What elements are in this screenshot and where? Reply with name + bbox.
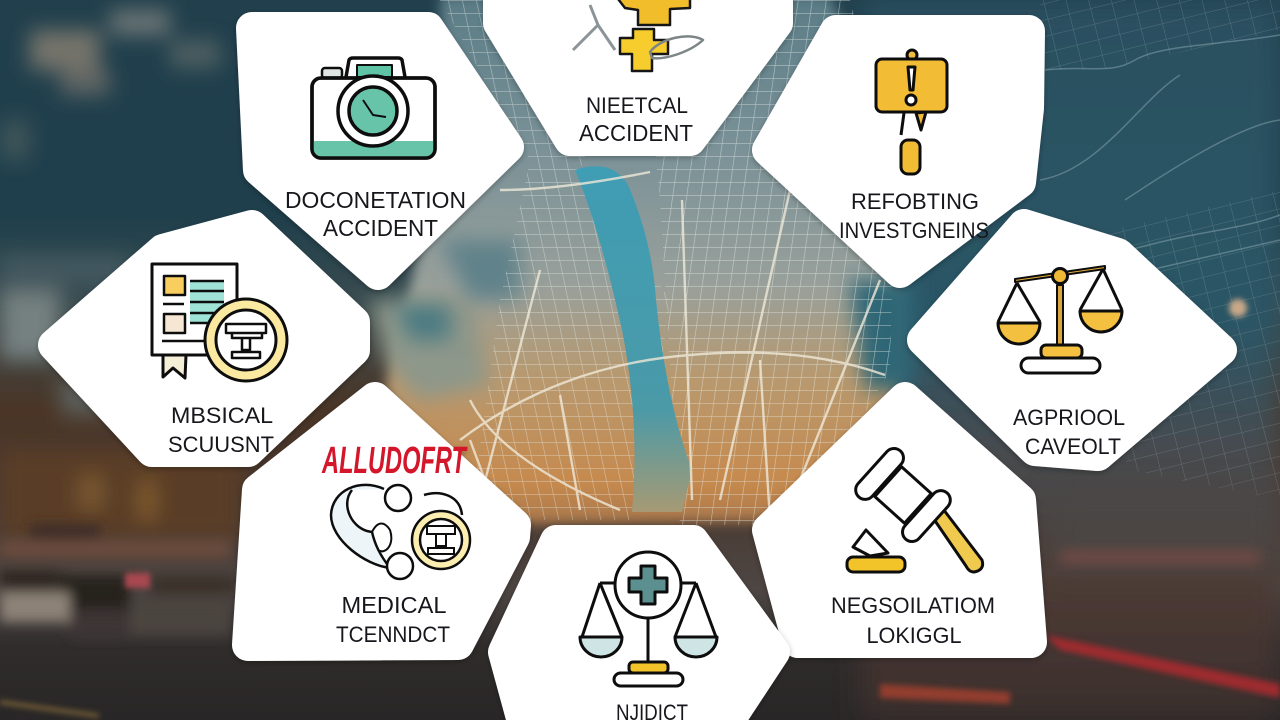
panel: documentation accident bbox=[252, 28, 508, 274]
panel: scales agreement right bbox=[923, 225, 1221, 459]
label: agreement: AGPRIOOL bbox=[1013, 405, 1125, 430]
panel: reporting investigation bbox=[768, 31, 1029, 272]
icon: gavel bbox=[847, 445, 983, 572]
label: legal: LOKIGGL bbox=[866, 623, 962, 648]
label line two: ACCIDENT bbox=[323, 215, 438, 241]
label: documentation: DOCONETATION bbox=[285, 187, 466, 213]
label: medical: MEDICAL bbox=[342, 592, 447, 618]
label: reporting: REFOBTING bbox=[851, 189, 979, 214]
label: medical: NIEETCAL bbox=[586, 93, 688, 118]
map area bbox=[370, 0, 915, 525]
label line two: ACCIDENT bbox=[579, 120, 693, 146]
label: negotiation: NEGSOILATIOM bbox=[831, 593, 995, 618]
icon: balance scales bbox=[998, 266, 1122, 373]
panel: medical accident top bbox=[499, 0, 777, 146]
red tail light and road line bbox=[0, 573, 150, 718]
label: caveat: CAVEOLT bbox=[1025, 434, 1121, 459]
icon: document with seal bbox=[152, 264, 287, 381]
traffic: cars bbox=[0, 525, 235, 638]
icon: body with seal bbox=[331, 485, 470, 579]
faint map right bbox=[1040, 0, 1280, 570]
icon: camera bbox=[312, 58, 435, 158]
streaks and lights bbox=[880, 35, 1280, 704]
label: treatment: TCENNDCT bbox=[336, 622, 450, 647]
panel: negotiation legal bbox=[768, 398, 1031, 648]
icon: yellow cross and stethoscope bbox=[573, 0, 703, 71]
label: investigation: INVESTGNEINS bbox=[839, 218, 989, 243]
panel: medical treatment left bbox=[54, 226, 354, 457]
panel: medical treatment lower left bbox=[248, 398, 515, 647]
label: medical: MBSICAL bbox=[171, 403, 273, 428]
label: treatment: SCUUSNT bbox=[168, 432, 274, 457]
heading: red stamp text: ALLUDOFRT bbox=[321, 440, 468, 482]
icon: scales with medical cross bbox=[580, 552, 717, 686]
panel: verdict bottom bbox=[504, 541, 774, 720]
icon: warning sign bbox=[876, 50, 947, 174]
